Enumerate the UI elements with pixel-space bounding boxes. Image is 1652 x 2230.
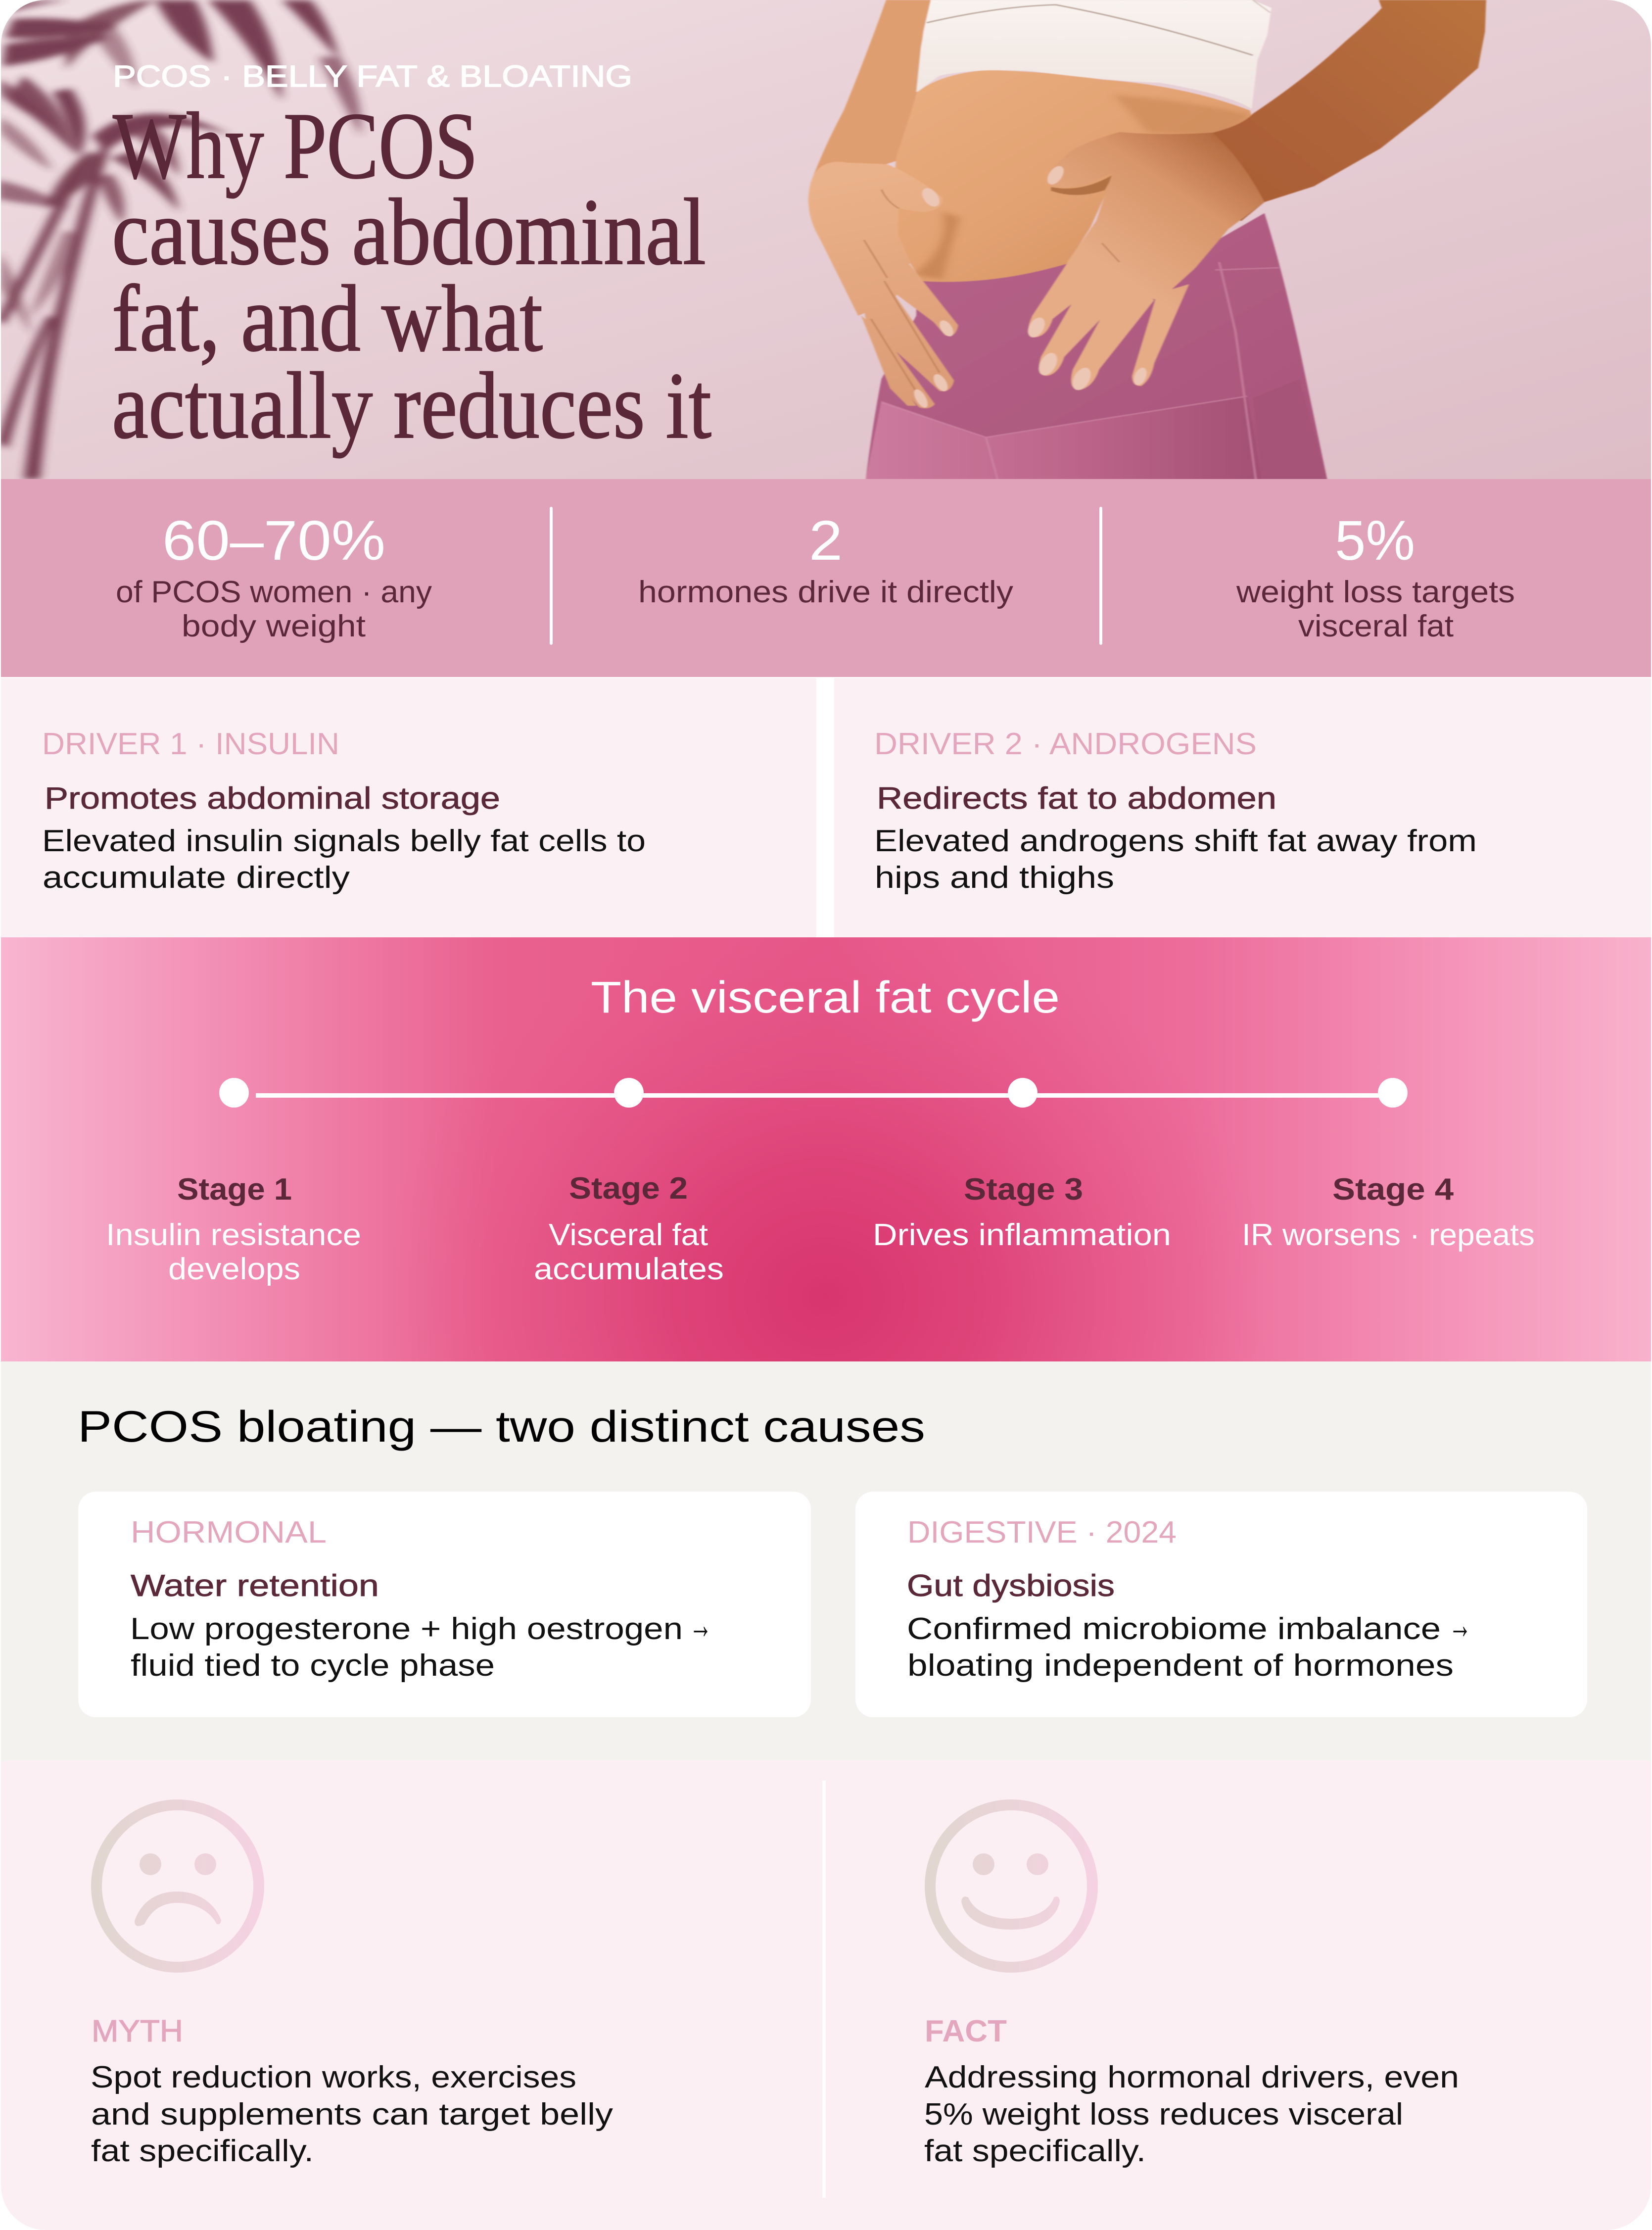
fact text: fat specifically. bbox=[924, 2134, 1146, 2168]
torso skin bbox=[894, 70, 1253, 282]
driver 2 card: hips and thighs bbox=[875, 861, 1114, 895]
panel: visceral fat cycle bbox=[0, 937, 1652, 1361]
panel: hero bbox=[0, 0, 1652, 479]
stat: 2 hormones: hormones drive it directly bbox=[638, 575, 1013, 609]
driver 2 card: DRIVER 2 · ANDROGENS bbox=[874, 727, 1257, 761]
kicker: PCOS · BELLY FAT & BLOATING bbox=[113, 59, 632, 93]
stage 1 bbox=[106, 1172, 361, 1286]
myth text: Spot reduction works, exercises bbox=[91, 2060, 576, 2094]
card: digestive: DIGESTIVE · 2024 bbox=[907, 1515, 1177, 1550]
title: Why PCOS bbox=[113, 93, 478, 198]
stage 1: develops bbox=[168, 1252, 300, 1286]
stage 3: Drives inflammation bbox=[873, 1218, 1171, 1252]
title: actually reduces it bbox=[112, 353, 711, 458]
image: blurred palm leaves bbox=[0, 0, 361, 479]
label: fact: FACT bbox=[925, 2014, 1007, 2048]
heading: PCOS bloating — two distinct causes bbox=[78, 1402, 925, 1451]
label: myth: MYTH bbox=[92, 2014, 183, 2048]
right arm bbox=[1195, 0, 1486, 221]
driver 1 card: DRIVER 1 · INSULIN bbox=[42, 727, 339, 761]
white crop top bbox=[916, 0, 1272, 109]
stage 2: Stage 2 bbox=[569, 1171, 688, 1206]
title: causes abdominal bbox=[112, 179, 706, 285]
title: fat, and what bbox=[112, 266, 543, 371]
stat: 60–70%: of PCOS women · any bbox=[116, 575, 432, 609]
panel: hormonal drivers bbox=[0, 677, 1652, 938]
right hand bbox=[1029, 132, 1265, 390]
stat: 60–70%: body weight bbox=[182, 609, 366, 643]
card: hormonal: Water retention bbox=[131, 1569, 379, 1603]
stat: 60–70% bbox=[116, 509, 432, 643]
stage 2 bbox=[534, 1171, 724, 1286]
fact text: 5% weight loss reduces visceral bbox=[924, 2097, 1403, 2132]
stage 4: IR worsens · repeats bbox=[1242, 1218, 1535, 1252]
card: hormonal: HORMONAL bbox=[131, 1515, 327, 1550]
card: digestive bbox=[855, 1492, 1587, 1717]
myth text: and supplements can target belly bbox=[91, 2097, 613, 2132]
stage 4 bbox=[1242, 1172, 1535, 1252]
driver 2 card bbox=[834, 678, 1652, 938]
image: woman's torso with hands on belly bbox=[808, 0, 1486, 479]
fact column bbox=[924, 1805, 1459, 2168]
stage 3 bbox=[873, 1172, 1171, 1252]
panel: bloating causes bbox=[0, 1361, 1652, 1762]
stat: 5%: weight loss targets bbox=[1236, 575, 1515, 609]
stat: 2 hormones: 2 bbox=[809, 509, 843, 572]
myth text: fat specifically. bbox=[91, 2134, 314, 2168]
icon: sad face bbox=[96, 1805, 259, 1967]
stat: 5% bbox=[1236, 509, 1515, 643]
icon: happy face bbox=[930, 1805, 1092, 1967]
stage 2: Visceral fat bbox=[549, 1218, 708, 1252]
stage 1: Stage 1 bbox=[177, 1172, 292, 1207]
card: hormonal: fluid tied to cycle phase bbox=[131, 1648, 495, 1683]
panel: myth vs fact bbox=[0, 1761, 1652, 2230]
driver 1 card bbox=[0, 678, 816, 938]
stat: 2 hormones bbox=[638, 509, 1013, 609]
fact text: Addressing hormonal drivers, even bbox=[925, 2060, 1459, 2094]
panel: stats band bbox=[0, 479, 1652, 677]
driver 2 card: Elevated androgens shift fat away from bbox=[874, 824, 1477, 858]
driver 1 card: Elevated insulin signals belly fat cells to bbox=[42, 824, 646, 858]
card: digestive: Confirmed microbiome imbalance bbox=[907, 1612, 1441, 1646]
card: digestive: Gut dysbiosis bbox=[907, 1569, 1115, 1603]
left forearm bbox=[810, 0, 931, 183]
stat: 60–70%: 60–70% bbox=[162, 509, 385, 572]
myth text bbox=[91, 2060, 613, 2168]
card: hormonal: → bbox=[689, 1602, 712, 1647]
card: hormonal bbox=[78, 1492, 811, 1717]
timeline bbox=[219, 1078, 1408, 1108]
card: digestive: bloating independent of hormones bbox=[907, 1648, 1454, 1683]
leggings bbox=[866, 213, 1327, 479]
stage 1: Insulin resistance bbox=[106, 1218, 361, 1252]
card: digestive: → bbox=[1449, 1602, 1471, 1647]
stage 4: Stage 4 bbox=[1332, 1172, 1454, 1207]
driver 2 card: Redirects fat to abdomen bbox=[877, 781, 1276, 816]
stage 3: Stage 3 bbox=[964, 1172, 1083, 1207]
stage 2: accumulates bbox=[534, 1252, 724, 1286]
stat: 5%: 5% bbox=[1335, 509, 1415, 572]
left hand bbox=[808, 162, 958, 408]
fact text bbox=[924, 2060, 1459, 2168]
title bbox=[112, 93, 711, 458]
finger creases bbox=[864, 190, 1119, 391]
driver 1 card: accumulate directly bbox=[43, 861, 350, 895]
myth column bbox=[91, 1805, 613, 2168]
card: hormonal: Low progesterone + high oestrogen bbox=[130, 1612, 683, 1646]
stat: 5%: visceral fat bbox=[1298, 609, 1454, 643]
finger nails bbox=[911, 165, 1149, 408]
heading: The visceral fat cycle bbox=[591, 973, 1060, 1022]
driver 1 card: Promotes abdominal storage bbox=[45, 781, 500, 816]
belly shading bbox=[913, 95, 1250, 280]
